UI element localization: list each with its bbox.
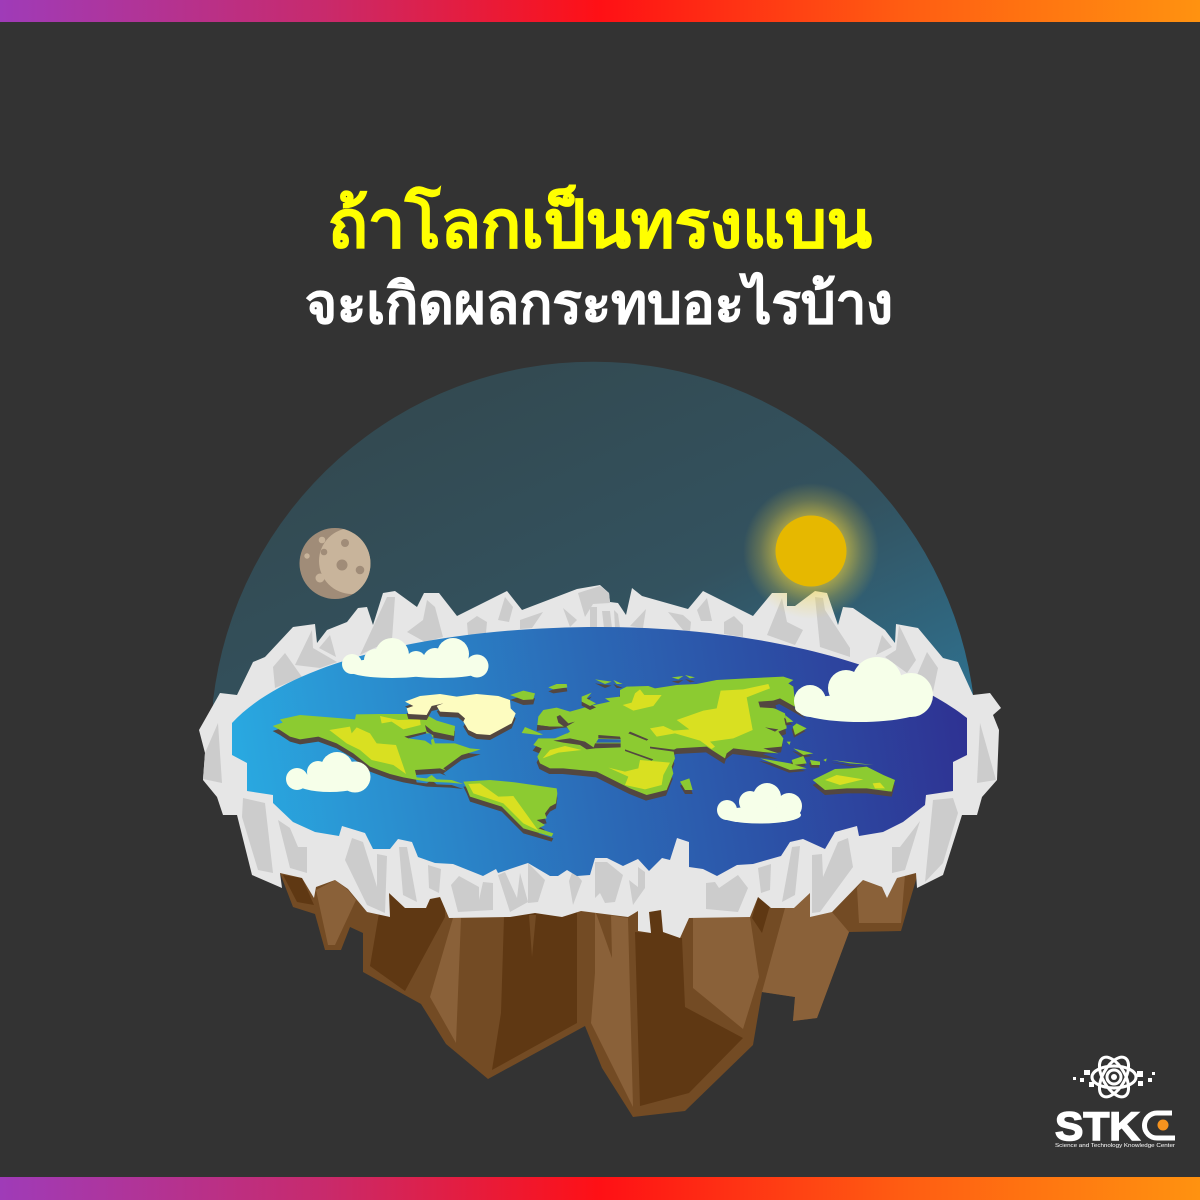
cloud: right large — [794, 657, 933, 722]
clouds — [286, 638, 933, 824]
cloud: top left pair — [342, 638, 488, 678]
logo wordmark: STK — [1055, 1105, 1140, 1149]
title line 2: จะเกิดผลกระทบอะไรบ้าง — [305, 271, 893, 335]
title — [305, 184, 893, 335]
logo letter C — [1144, 1113, 1175, 1138]
continents: Eurasia and Africa — [533, 677, 807, 801]
sun — [743, 483, 879, 619]
South America — [463, 780, 557, 842]
cloud: bottom right — [717, 783, 802, 824]
Australia — [813, 767, 895, 797]
top gradient bar — [0, 0, 1200, 22]
Iceland — [510, 684, 567, 705]
sky dome — [213, 362, 974, 760]
moon — [300, 528, 370, 599]
ice wall rim — [199, 585, 1001, 938]
logo pixel squares — [1073, 1070, 1155, 1087]
title line 1: ถ้าโลกเป็นทรงแบน — [328, 184, 872, 261]
continents: Southeast Asia and Australia — [759, 715, 895, 797]
floating rock underside — [280, 860, 918, 1117]
continents: North America — [273, 714, 481, 789]
logo atom icon — [1092, 1052, 1136, 1102]
continents: northern islands and Madagascar — [582, 675, 695, 794]
logo: STKC — [1055, 1052, 1175, 1149]
continents: UK — [522, 727, 543, 735]
cloud: over North America — [286, 752, 370, 792]
grey rock facets — [203, 586, 996, 913]
Greenland — [405, 694, 516, 740]
logo orange dot — [1158, 1120, 1168, 1130]
Southeast Asia islands — [759, 715, 873, 773]
bottom gradient bar — [0, 1177, 1200, 1200]
ocean disc — [232, 627, 967, 876]
logo tagline: Science and Technology Knowledge Center — [1055, 1143, 1175, 1149]
continents: South America and Greenland — [405, 684, 567, 842]
